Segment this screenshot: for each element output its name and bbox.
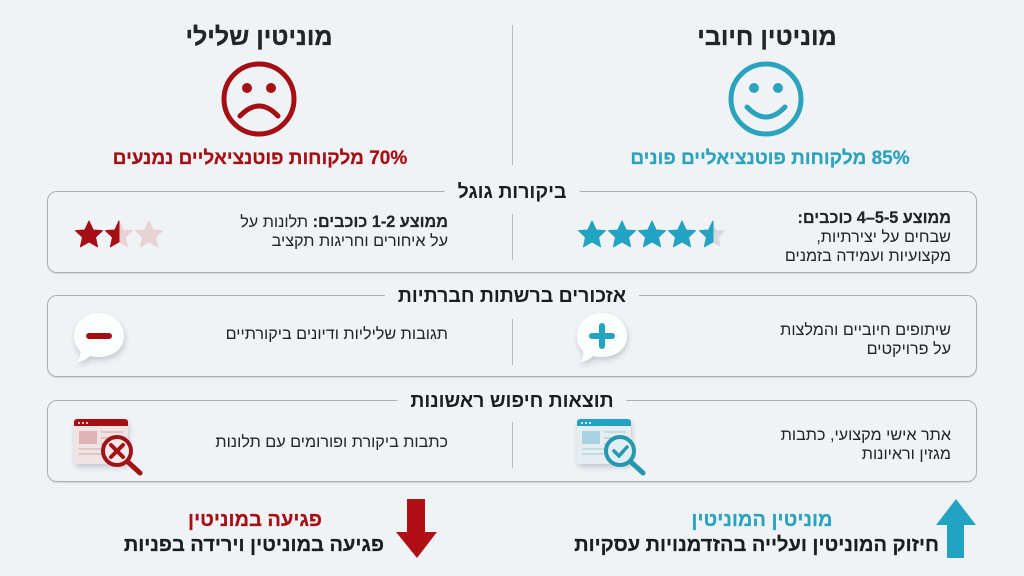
negative social text: תגובות שליליות ודיונים ביקורתיים xyxy=(226,325,448,343)
icon: happy face xyxy=(728,62,804,136)
positive reviews text: שבחים על יצירתיות, xyxy=(816,228,951,246)
panel heading: first search results: תוצאות חיפוש ראשונות xyxy=(410,390,614,412)
negative reviews text xyxy=(240,213,448,250)
heading: positive reputation: מוניטין חיובי xyxy=(697,23,837,51)
icon: minus speech bubble xyxy=(72,313,128,366)
negative outcome text: פגיעה במוניטין וירידה בפניות xyxy=(124,534,384,556)
panel heading: social media mentions: אזכורים ברשתות חברתיות xyxy=(398,285,626,307)
positive outcome text: חיזוק המוניטין ועלייה בהזדמנויות עסקיות xyxy=(574,534,939,556)
icon: positive star rating xyxy=(578,220,726,248)
heading: negative reputation: מוניטין שלילי xyxy=(185,23,333,51)
icon: negative star rating xyxy=(75,220,163,248)
positive social text: על פרויקטים xyxy=(867,340,951,358)
center divider xyxy=(512,25,513,165)
panel: first search results xyxy=(47,400,977,482)
positive reviews text: מקצועיות ועמידה בזמנים xyxy=(785,247,951,265)
panel divider xyxy=(512,214,513,260)
icon: website with check magnifier xyxy=(575,419,646,476)
icon: sad face xyxy=(222,62,296,136)
negative reviews text: ממוצע 1-2 כוכבים: תלונות על xyxy=(240,213,448,231)
icon: website with x magnifier xyxy=(72,419,142,476)
positive search text xyxy=(781,426,951,463)
panel heading: google reviews: ביקורות גוגל xyxy=(458,181,566,203)
icon: down arrow xyxy=(396,499,437,558)
positive social text xyxy=(780,321,951,358)
panel divider xyxy=(512,422,513,468)
positive reviews text xyxy=(785,209,951,265)
negative statistic: 70% מלקוחות פוטנציאליים נמנעים xyxy=(113,148,407,169)
positive search text: מגזין וראיונות xyxy=(862,445,951,463)
positive search text: אתר אישי מקצועי, כתבות xyxy=(781,426,951,444)
negative search text: כתבות ביקורת ופורומים עם תלונות xyxy=(215,433,448,451)
positive reviews text: ממוצע 5-5–4 כוכבים: xyxy=(798,209,951,227)
panel: social media mentions xyxy=(47,295,977,377)
panel: google reviews xyxy=(47,191,977,273)
positive outcome title: מוניטין המוניטין xyxy=(691,509,833,531)
negative reviews text: על איחורים וחריגות תקציב xyxy=(272,232,448,250)
positive statistic: 85% מלקוחות פוטנציאליים פונים xyxy=(630,148,910,169)
icon: plus speech bubble xyxy=(576,313,630,366)
negative outcome title: פגיעה במוניטין xyxy=(188,509,322,531)
panel divider xyxy=(512,319,513,365)
positive social text: שיתופים חיוביים והמלצות xyxy=(780,321,951,339)
icon: up arrow xyxy=(936,499,976,558)
